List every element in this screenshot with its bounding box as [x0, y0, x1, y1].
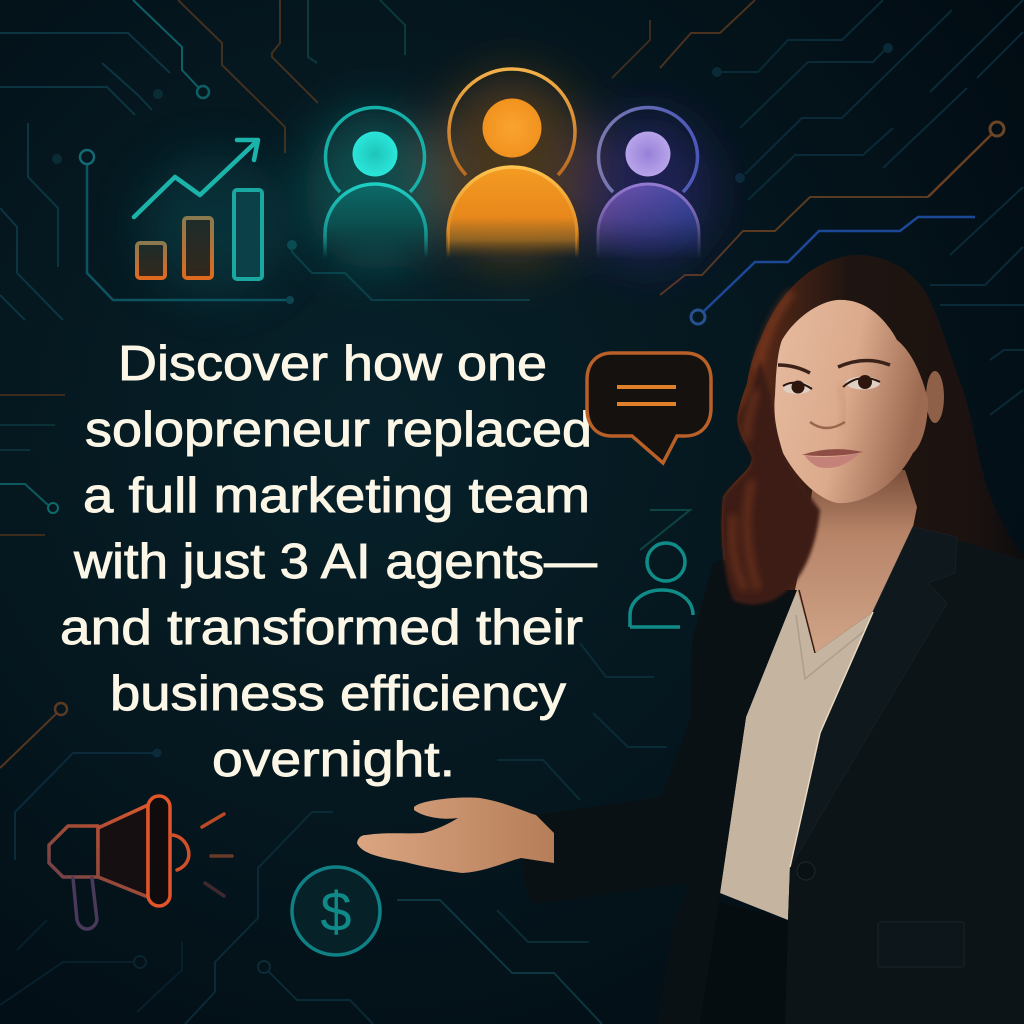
glow behind agents — [305, 75, 713, 270]
necklace strap — [799, 590, 815, 653]
icon: speech bubble — [587, 353, 711, 463]
jacket button — [797, 862, 815, 880]
icon: megaphone — [49, 796, 232, 929]
hair strands top — [757, 292, 792, 370]
headline: overnight. — [212, 733, 455, 787]
bar 2 — [184, 218, 212, 278]
hair highlights — [732, 390, 758, 590]
headline — [60, 337, 597, 787]
person icon: purple agent — [598, 107, 699, 258]
trend arrow — [134, 140, 258, 217]
beige top — [720, 590, 873, 920]
headline: solopreneur replaced — [85, 403, 592, 457]
headline: and transformed their — [60, 601, 583, 655]
person icon: teal agent — [325, 107, 426, 258]
bar 3 — [234, 190, 262, 279]
top neckline — [796, 615, 868, 679]
headline: business efficiency — [110, 667, 567, 721]
lapel edge highlight — [790, 612, 873, 867]
trousers — [700, 902, 788, 1024]
lapel — [790, 527, 957, 867]
presenter — [357, 255, 1024, 1024]
pocket — [878, 922, 964, 967]
chart icon — [134, 140, 262, 279]
icon: dollar coin: $ — [320, 880, 352, 943]
bar 1 — [137, 243, 165, 278]
hair back — [722, 255, 1024, 600]
face — [774, 300, 928, 503]
eyes and brows — [778, 360, 890, 394]
headline: a full marketing team — [83, 469, 590, 523]
jacket right — [785, 527, 1024, 1024]
icon: dollar coin — [292, 867, 380, 955]
jacket left with sleeve — [523, 560, 797, 1024]
person icon: orange agent — [448, 69, 577, 258]
hand — [357, 797, 554, 873]
neck — [795, 470, 917, 653]
glow behind chart — [140, 155, 290, 295]
hair front lock — [722, 360, 820, 604]
ear — [926, 371, 944, 423]
headline: with just 3 AI agents— — [73, 535, 597, 589]
nose and mouth — [802, 385, 863, 468]
icon: small user — [630, 543, 693, 627]
headline: Discover how one — [118, 337, 547, 391]
